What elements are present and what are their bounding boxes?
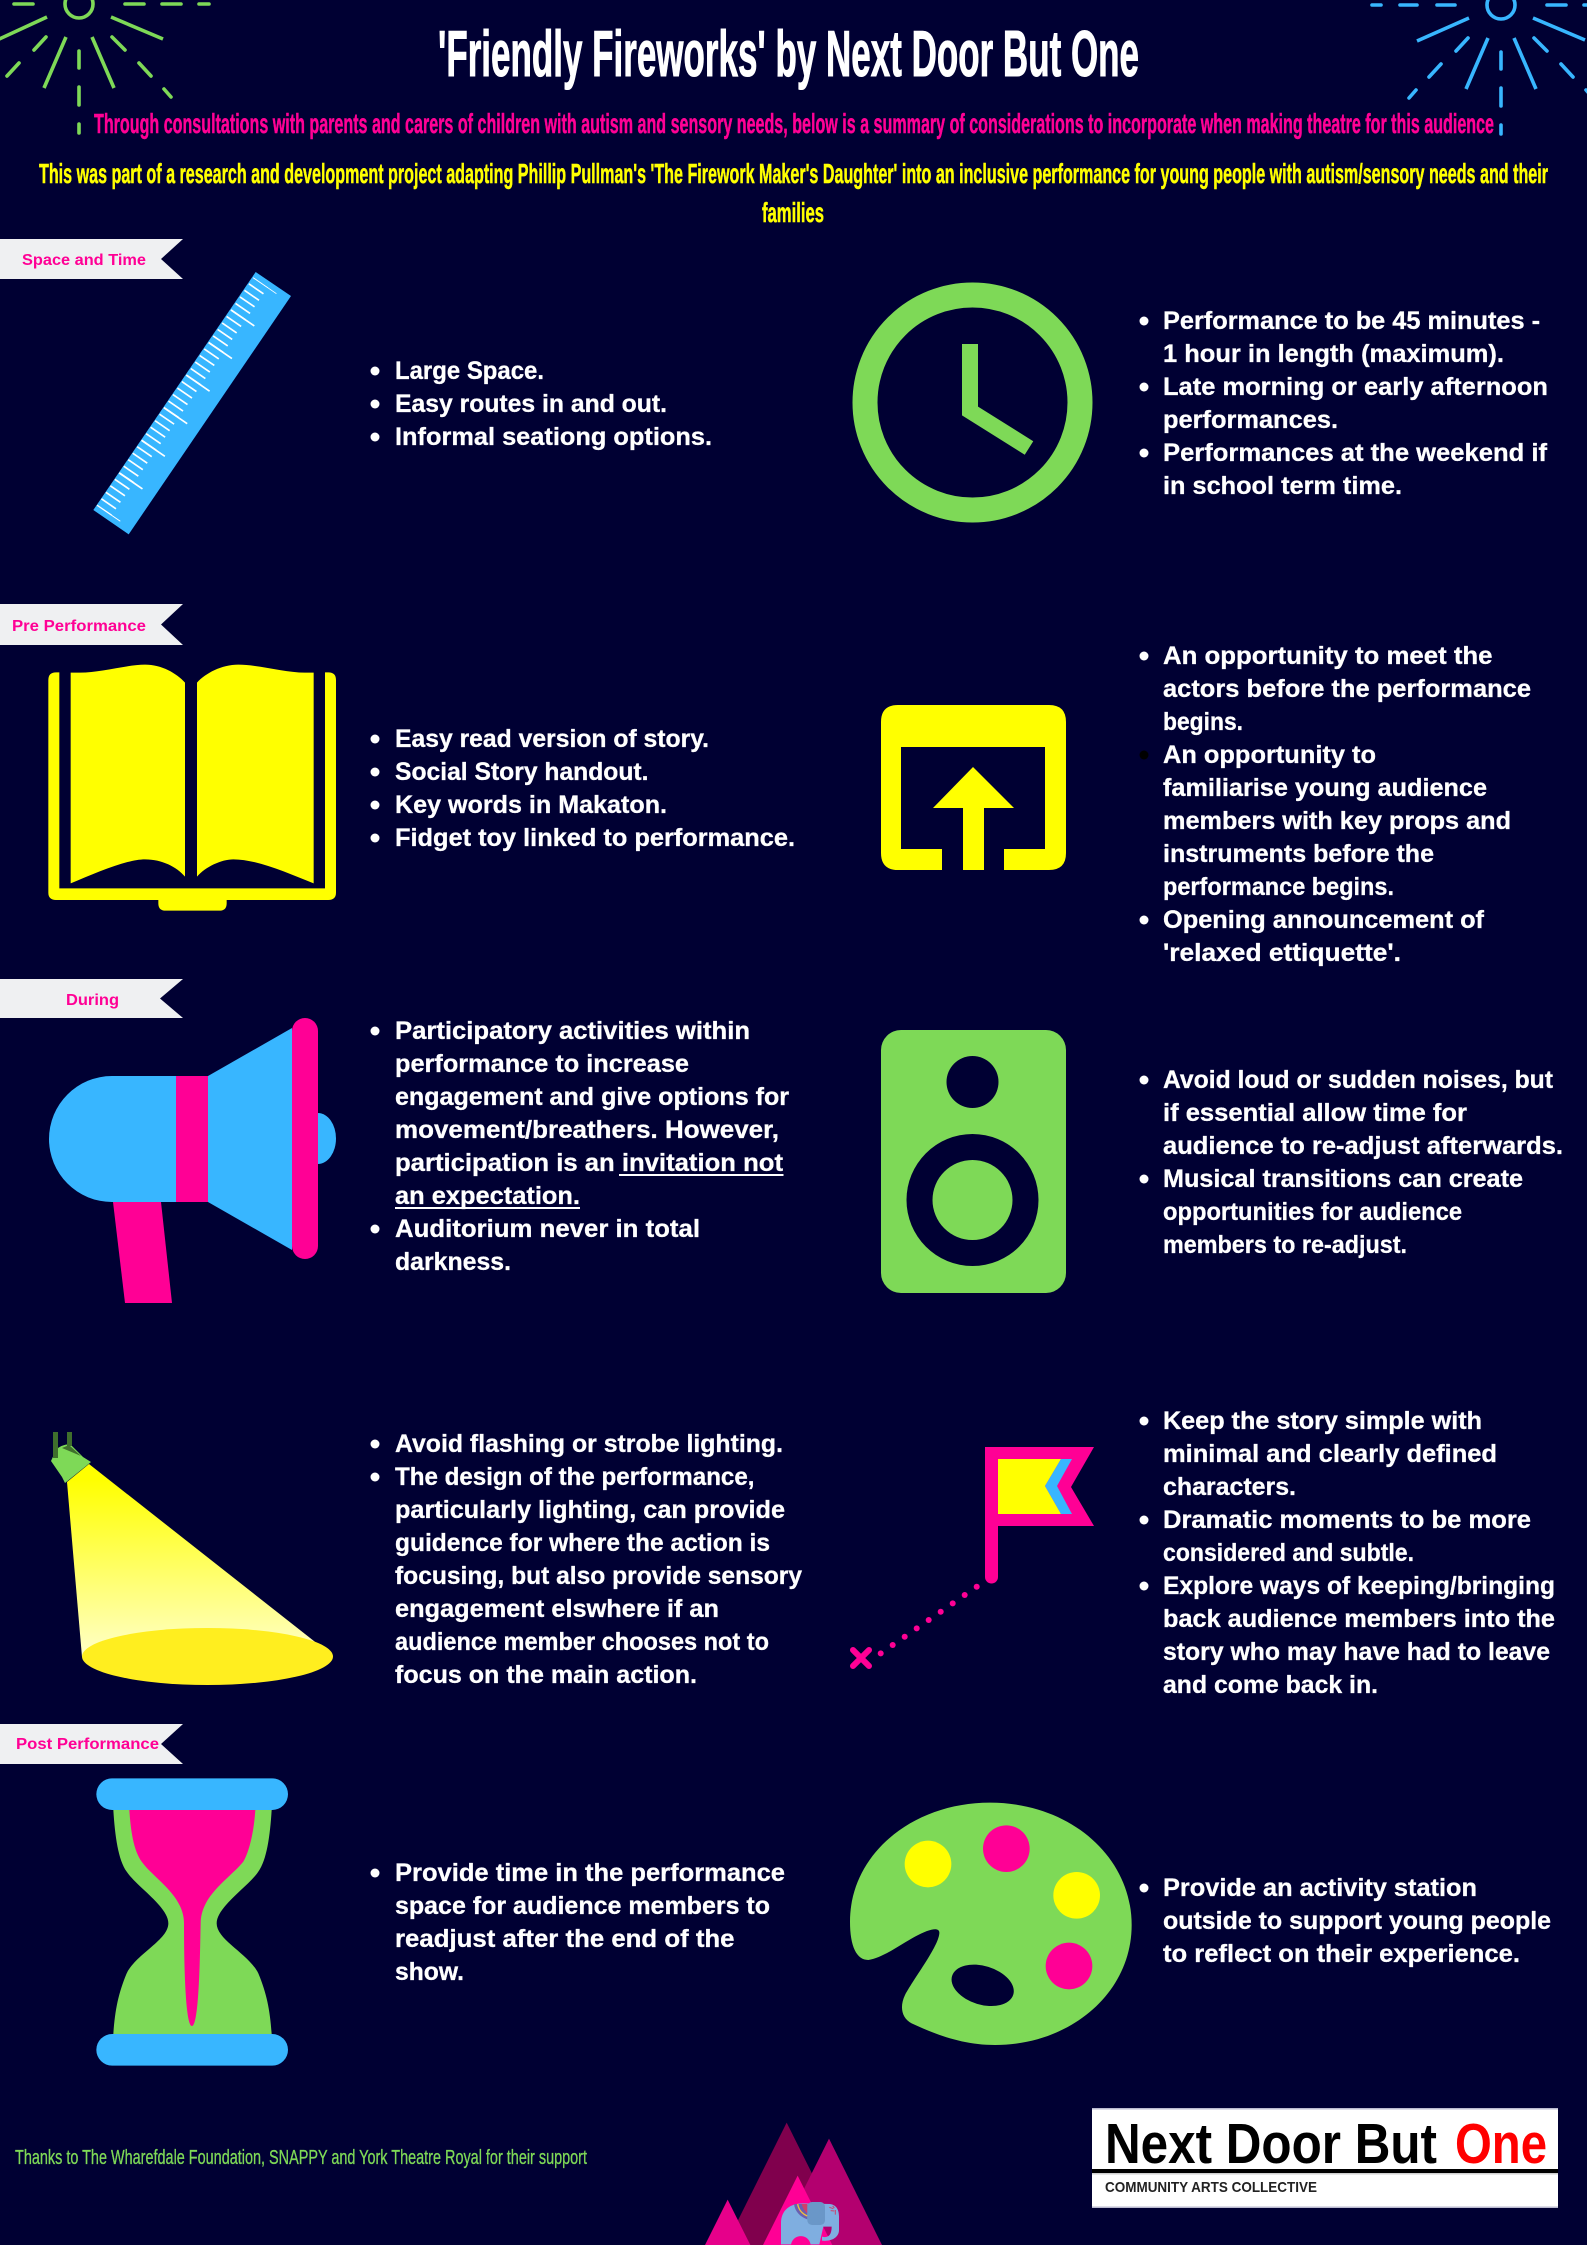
list: story: story who may have had to leave	[1163, 1638, 1550, 1666]
icon: hourglass	[96, 1778, 288, 2066]
list: story: and come back in.	[1163, 1671, 1378, 1699]
list: story: considered and subtle.	[1163, 1539, 1414, 1567]
list: meeting the actors	[1140, 642, 1531, 967]
list: pre show materials	[370, 725, 795, 852]
banner: during	[0, 979, 183, 1018]
list: meeting the actors: Opening announcement of	[1163, 906, 1485, 934]
list: pre show materials: Social Story handout.	[395, 758, 648, 786]
list: pre show materials: Key words in Makaton.	[395, 791, 667, 819]
list: time: Performances at the weekend if	[1163, 439, 1548, 467]
list: sound: Avoid loud or sudden noises, but	[1163, 1066, 1554, 1094]
banner: pre performance	[0, 604, 183, 645]
list: time: performances.	[1163, 406, 1338, 434]
thanks text: Thanks to The Wharefdale Foundation, SNAPPY and York Theatre Royal for their support	[15, 2147, 587, 2169]
list: lighting: guidence for where the action is	[395, 1529, 770, 1557]
icon: spotlight	[51, 1432, 333, 1685]
icon: open book	[48, 665, 336, 911]
list: participation: engagement and give options for	[395, 1083, 789, 1111]
list: meeting the actors: performance begins.	[1163, 873, 1394, 901]
list: time	[1140, 307, 1548, 500]
panel: during	[0, 979, 1563, 1699]
yellow project text: families	[762, 197, 824, 228]
icon: share arrow	[881, 705, 1066, 870]
icon: megaphone	[49, 1018, 336, 1303]
list: activity station: to reflect on their experience.	[1163, 1940, 1520, 1968]
list: sound	[1140, 1066, 1563, 1259]
icon: blue firework top right	[1372, 0, 1587, 134]
list: readjust time: space for audience members to	[395, 1892, 770, 1920]
list: activity station	[1140, 1874, 1551, 1968]
list: meeting the actors: 'relaxed ettiquette'.	[1163, 939, 1401, 967]
list: lighting: focus on the main action.	[395, 1661, 697, 1689]
list: story: Keep the story simple with	[1163, 1407, 1482, 1435]
list: space	[370, 357, 712, 451]
panel: post performance	[0, 1724, 1551, 2066]
list: space: Large Space.	[395, 357, 544, 385]
list: sound: audience to re-adjust afterwards.	[1163, 1132, 1563, 1160]
list: lighting: audience member chooses not to	[395, 1628, 769, 1656]
list: story: minimal and clearly defined	[1163, 1440, 1497, 1468]
list: lighting: particularly lighting, can provide	[395, 1496, 785, 1524]
icon: flag and dotted route	[853, 1447, 1094, 1666]
list: time: Performance to be 45 minutes -	[1163, 307, 1540, 335]
list: participation: darkness.	[395, 1248, 511, 1276]
list: readjust time: readjust after the end of the	[395, 1925, 735, 1953]
banner: post performance: Post Performance	[16, 1736, 159, 1753]
list: lighting: engagement elswhere if an	[395, 1595, 719, 1623]
list: story	[1140, 1407, 1555, 1699]
icon: speaker	[881, 1030, 1066, 1293]
logo: next door but one	[1092, 2108, 1558, 2208]
list: participation: Participatory activities within	[395, 1017, 750, 1045]
yellow project text	[39, 158, 1548, 228]
list: space: Informal seationg options.	[395, 423, 712, 451]
list: story: Dramatic moments to be more	[1163, 1506, 1531, 1534]
list: readjust time: show.	[395, 1958, 464, 1986]
list: sound: Musical transitions can create	[1163, 1165, 1523, 1193]
list: participation	[370, 1017, 789, 1276]
list: meeting the actors: members with key props and	[1163, 807, 1511, 835]
list: pre show materials: Easy read version of story.	[395, 725, 709, 753]
banner: space and time	[0, 239, 183, 279]
list: meeting the actors: instruments before the	[1163, 840, 1434, 868]
logo: next door but one: COMMUNITY ARTS COLLECTIVE	[1105, 2179, 1317, 2196]
list: pre show materials: Fidget toy linked to performance.	[395, 824, 795, 852]
list: sound: members to re-adjust.	[1163, 1231, 1407, 1259]
list: meeting the actors: familiarise young audience	[1163, 774, 1487, 802]
list: readjust time: Provide time in the performance	[395, 1859, 785, 1887]
list: story: back audience members into the	[1163, 1605, 1555, 1633]
banner: during: During	[66, 992, 119, 1009]
list: sound: if essential allow time for	[1163, 1099, 1467, 1127]
list: activity station: outside to support young people	[1163, 1907, 1551, 1935]
list: story: Explore ways of keeping/bringing	[1163, 1572, 1555, 1600]
icon: green firework top left	[0, 0, 209, 133]
list: lighting: focusing, but also provide sensory	[395, 1562, 802, 1590]
list: space: Easy routes in and out.	[395, 390, 667, 418]
icon: ruler	[93, 272, 291, 534]
list: participation: performance to increase	[395, 1050, 689, 1078]
list: meeting the actors: An opportunity to meet the	[1163, 642, 1493, 670]
banner: space and time: Space and Time	[22, 252, 146, 269]
icon: clock	[865, 295, 1080, 510]
list: activity station: Provide an activity station	[1163, 1874, 1477, 1902]
banner: pre performance: Pre Performance	[12, 618, 146, 635]
list: lighting: Avoid flashing or strobe lighting.	[395, 1430, 783, 1458]
logo: mountains and elephant	[705, 2123, 882, 2245]
icon: paint palette	[850, 1803, 1132, 2045]
list: participation: participation is an invitation not	[395, 1149, 784, 1177]
list: meeting the actors: actors before the performance	[1163, 675, 1531, 703]
list: meeting the actors: begins.	[1163, 708, 1243, 736]
logo: next door but one: Next Door But	[1105, 2112, 1437, 2176]
list: time: Late morning or early afternoon	[1163, 373, 1548, 401]
list: lighting: The design of the performance,	[395, 1463, 754, 1491]
panel: pre performance	[0, 604, 1531, 967]
list: sound: opportunities for audience	[1163, 1198, 1462, 1226]
list: lighting	[370, 1430, 802, 1689]
list: meeting the actors: An opportunity to	[1163, 741, 1376, 769]
list: time: 1 hour in length (maximum).	[1163, 340, 1504, 368]
panel: space and time	[0, 239, 1548, 534]
list: time: in school term time.	[1163, 472, 1402, 500]
list: participation: movement/breathers. However,	[395, 1116, 779, 1144]
banner: post performance	[0, 1724, 183, 1764]
list: readjust time	[370, 1859, 785, 1986]
list: participation: an expectation.	[395, 1182, 580, 1210]
list: story: characters.	[1163, 1473, 1296, 1501]
list: participation: Auditorium never in total	[395, 1215, 700, 1243]
logo: next door but one: One	[1455, 2112, 1547, 2176]
